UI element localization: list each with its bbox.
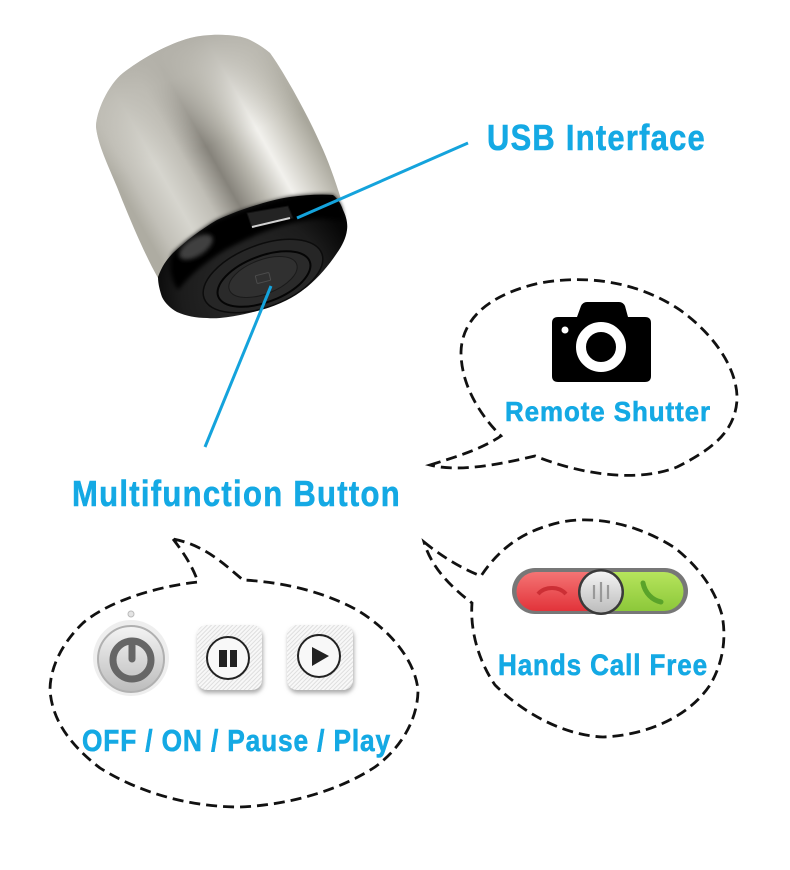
pointer line: USB xyxy=(297,143,468,218)
metal body xyxy=(96,34,340,278)
icon: pause button xyxy=(197,625,263,693)
usb port xyxy=(247,206,293,228)
base reflection xyxy=(175,229,217,265)
icon: call toggle xyxy=(512,568,688,615)
label: USB Interface: USB Interface xyxy=(487,117,706,158)
speech bubble: remote shutter xyxy=(430,280,737,475)
pointer line: button xyxy=(205,286,271,447)
speech bubble: controls xyxy=(50,539,418,807)
label: Multifunction Button: Multifunction Button xyxy=(72,473,401,514)
icon: play button xyxy=(287,625,354,693)
label: OFF / ON / Pause / Play: OFF / ON / Pause / Play xyxy=(82,723,391,758)
infographic canvas xyxy=(48,34,738,808)
label: Hands Call Free: Hands Call Free xyxy=(498,649,708,682)
label: Remote Shutter: Remote Shutter xyxy=(505,396,711,427)
answer handset xyxy=(643,583,661,602)
hang up handset xyxy=(538,588,566,594)
black base xyxy=(158,195,347,318)
speech bubble: hands call free xyxy=(424,520,724,737)
speaker product photo xyxy=(96,34,348,318)
base top edge shadow xyxy=(170,195,343,290)
icon: power button xyxy=(93,611,169,696)
icon: camera xyxy=(552,302,651,382)
multifunction button rings xyxy=(193,224,333,328)
